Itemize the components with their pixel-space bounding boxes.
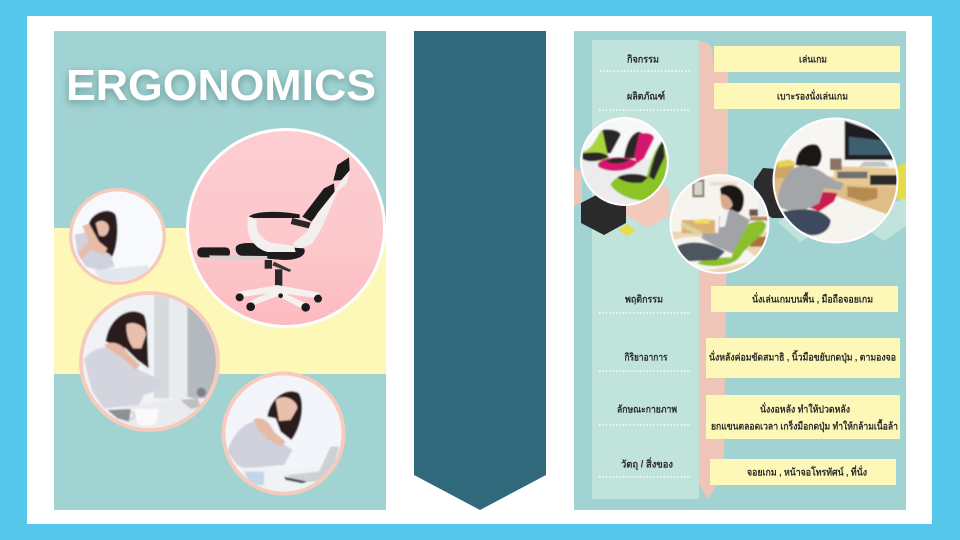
photo: woman holding wrist xyxy=(69,188,167,287)
panel: product details xyxy=(574,31,906,510)
row: behaviour: นั่งเล่นเกมบนพื้น , มือถือจอยเกม xyxy=(752,292,873,306)
row: physical traits: ยกแขนตลอดเวลา เกร็งมือกดปุ่ม ทำให้กล้ามเนื้อล้า xyxy=(711,418,898,432)
title: ERGONOMICS xyxy=(66,61,376,110)
row: behaviour xyxy=(599,286,898,313)
photo: woman holding shoulder xyxy=(221,372,347,498)
pink brush stroke xyxy=(699,41,728,500)
row: posture xyxy=(599,338,900,378)
center banner arrow xyxy=(414,31,546,510)
row: physical traits: นั่งงอหลัง ทำให้ปวดหลัง xyxy=(760,402,850,416)
photo: reclining office chair xyxy=(186,128,386,328)
row: physical traits xyxy=(599,395,900,439)
photo: woman gaming before tv xyxy=(772,117,899,247)
row: objects: จอยเกม , หน้าจอโทรทัศน์ , ที่นั่ง xyxy=(747,464,867,478)
row: behaviour: พฤติกรรม xyxy=(625,294,663,306)
row: posture: นั่งหลังค่อมขัดสมาธิ , นิ้วมือขยับกดปุ่ม , ตามองจอ xyxy=(709,350,896,364)
row: physical traits: ลักษณะกายภาพ xyxy=(617,404,677,416)
panel: ergonomics photos xyxy=(54,31,386,510)
row: objects: วัตถุ / สิ่งของ xyxy=(621,456,673,470)
decorative hexagons xyxy=(574,162,906,242)
row: product xyxy=(599,83,900,110)
label column xyxy=(592,40,699,499)
row: product: เบาะรองนั่งเล่นเกม xyxy=(777,88,848,102)
row: posture: กิริยาอาการ xyxy=(624,352,668,364)
row: activity xyxy=(600,46,900,72)
photo: woman holding neck xyxy=(77,288,221,435)
photo: woman reading on seat xyxy=(668,173,770,274)
yellow band xyxy=(54,228,386,374)
photo: gaming floor seats xyxy=(579,115,671,208)
row: activity: กิจกรรม xyxy=(627,54,659,66)
row: product: ผลิตภัณฑ์ xyxy=(627,90,665,102)
row: activity: เล่นเกม xyxy=(799,54,827,66)
row: objects xyxy=(599,456,896,485)
